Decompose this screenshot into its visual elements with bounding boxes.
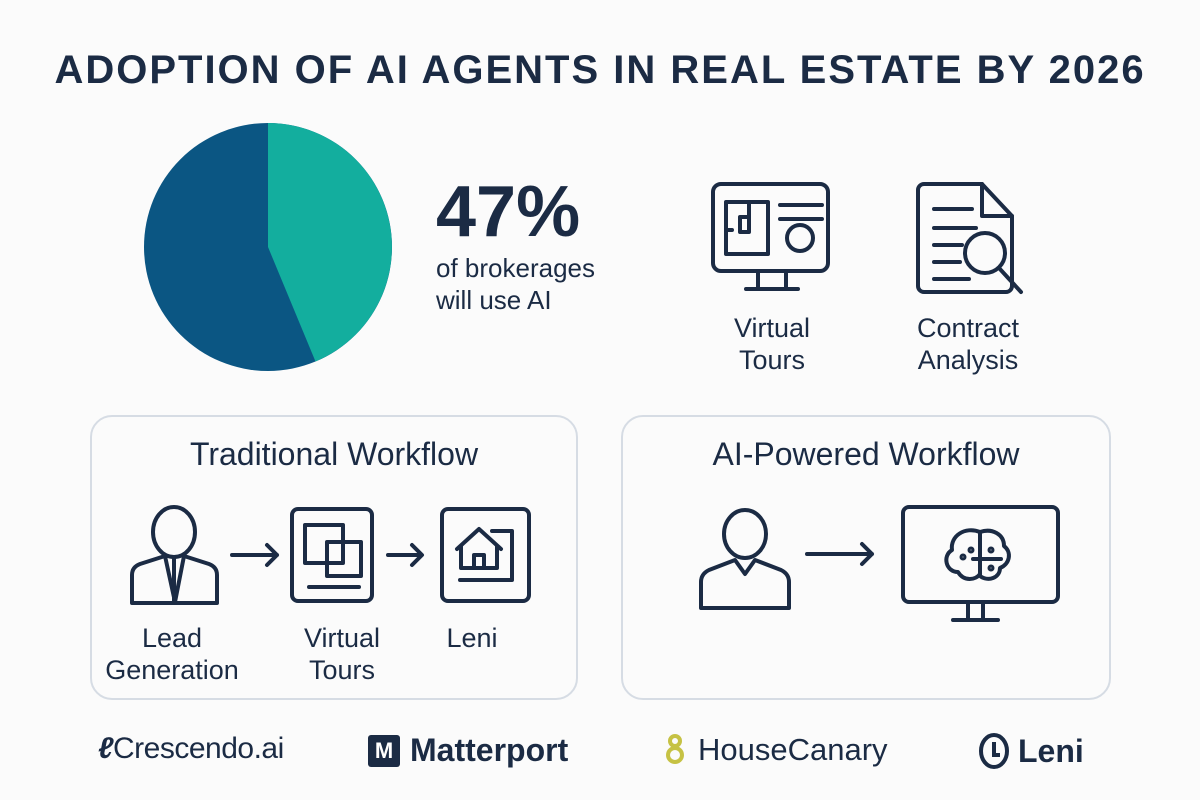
pie chart xyxy=(144,123,392,371)
icon flow xyxy=(130,505,531,605)
stat text: of brokerages xyxy=(436,253,595,283)
heading: Traditional Workflow xyxy=(190,436,478,472)
logo: matterport: M xyxy=(375,738,393,762)
label: virtual tours xyxy=(734,313,810,375)
icon: virtual tours monitor xyxy=(711,182,830,291)
label: virtual tours: Virtual xyxy=(304,623,380,653)
label: virtual tours: Tours xyxy=(309,655,375,685)
heading: AI-Powered Workflow xyxy=(712,436,1020,472)
logo: matterport: Matterport xyxy=(410,732,568,768)
label: lead generation xyxy=(105,623,239,685)
panel: traditional workflow xyxy=(90,415,578,700)
label: contract analysis: Analysis xyxy=(918,345,1018,375)
label: leni: Leni xyxy=(446,623,498,653)
stat text: 47% xyxy=(436,172,580,252)
panel: AI-powered workflow xyxy=(621,415,1111,700)
label: lead generation: Lead xyxy=(142,623,202,653)
label: contract analysis xyxy=(917,313,1019,375)
stat text xyxy=(436,172,595,315)
label: virtual tours: Virtual xyxy=(734,313,810,343)
logo: housecanary: HouseCanary xyxy=(698,732,888,767)
label: contract analysis: Contract xyxy=(917,313,1019,343)
icon: contract analysis xyxy=(916,182,1024,294)
icon flow xyxy=(699,505,1060,622)
logo: leni xyxy=(979,732,1084,769)
label: virtual tours: Tours xyxy=(739,345,805,375)
logo: crescendo.ai: ℓCrescendo.ai xyxy=(98,732,284,765)
label: lead generation: Generation xyxy=(105,655,239,685)
label: virtual tours xyxy=(304,623,380,685)
title: ADOPTION OF AI AGENTS IN REAL ESTATE BY 2026 xyxy=(54,48,1146,92)
logo: leni: Leni xyxy=(1018,732,1084,768)
stat text: will use AI xyxy=(436,285,552,315)
